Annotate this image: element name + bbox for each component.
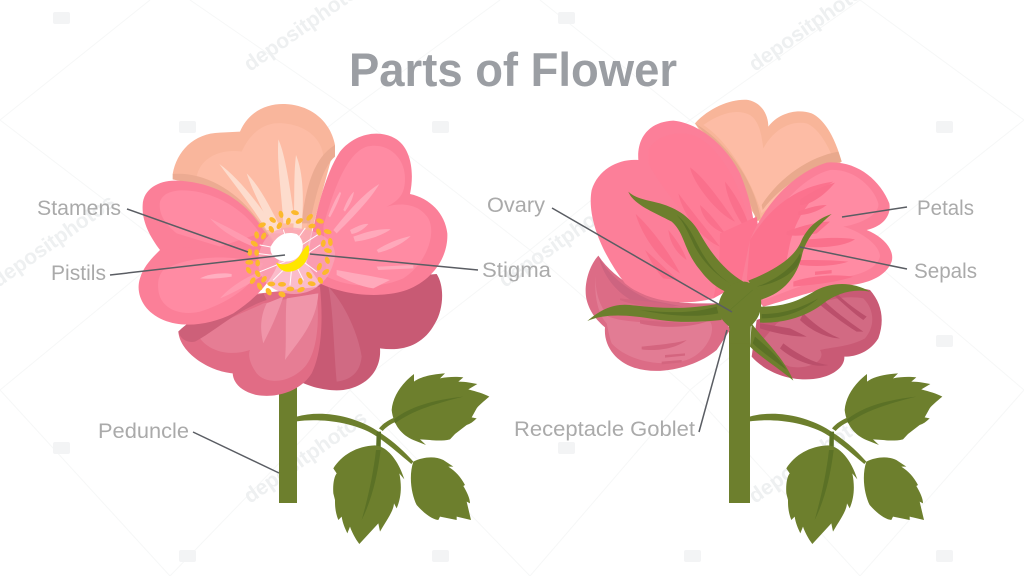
leaves: front flower [297, 373, 489, 544]
title: Parts of Flower [349, 43, 677, 96]
label: Stamens [37, 197, 248, 252]
label: Peduncle: Peduncle [98, 420, 189, 443]
label: Stamens: Stamens [37, 197, 121, 220]
sepal: lower right [750, 323, 793, 381]
leaf: lower left [786, 445, 857, 544]
sepal: right [760, 284, 870, 323]
stem: back flower [729, 320, 750, 503]
leaf branch [750, 414, 866, 464]
calyx: receptacle [718, 282, 761, 343]
label: Sepals: Sepals [914, 260, 977, 283]
right flower: back view [586, 100, 892, 503]
leaf: lower right [864, 457, 924, 520]
text: depositphotos [745, 406, 876, 508]
label: Peduncle [98, 420, 279, 473]
petal: left large [591, 121, 755, 302]
label: Stigma: Stigma [482, 259, 551, 282]
sepal: upper left [628, 192, 743, 293]
leaf branch [297, 414, 413, 464]
stigma: white center and yellow arc [270, 233, 303, 262]
sepal: upper right [748, 214, 832, 300]
text: depositphotos [495, 190, 626, 292]
filaments [257, 228, 320, 285]
petal: dark back right [752, 288, 882, 379]
petal: upper left [143, 181, 287, 257]
center: pale rays [258, 227, 335, 294]
label: Receptacle Goblet [514, 330, 727, 441]
label: Sepals [800, 247, 977, 283]
label: Pistils: Pistils [51, 262, 106, 285]
label: Ovary [487, 194, 732, 312]
stamens: anthers [245, 209, 333, 298]
leaf: top [845, 373, 942, 445]
petal: back peach [695, 100, 842, 223]
leaf: lower left [333, 445, 404, 544]
petal: back peach [173, 104, 335, 253]
label: Stigma [310, 254, 551, 282]
petal: back dark right [297, 274, 442, 390]
label: Petals [842, 197, 974, 220]
petal: right large [742, 162, 892, 307]
left flower: front view [139, 104, 447, 503]
label: Receptacle Goblet: Receptacle Goblet [514, 418, 695, 441]
leaves: back flower [750, 373, 942, 544]
petal: bottom [178, 287, 322, 396]
sepal: left [587, 303, 722, 322]
leaf: lower right [411, 457, 471, 520]
petal: lower left [139, 247, 280, 325]
petal: dark back left [586, 256, 730, 371]
stem: front flower [279, 385, 297, 503]
label: Petals: Petals [917, 197, 974, 220]
leaf: top [392, 373, 489, 445]
petal: right pair [307, 134, 447, 295]
text: depositphotos [240, 406, 371, 508]
label: Pistils [51, 255, 285, 285]
label: Ovary: Ovary [487, 194, 546, 217]
